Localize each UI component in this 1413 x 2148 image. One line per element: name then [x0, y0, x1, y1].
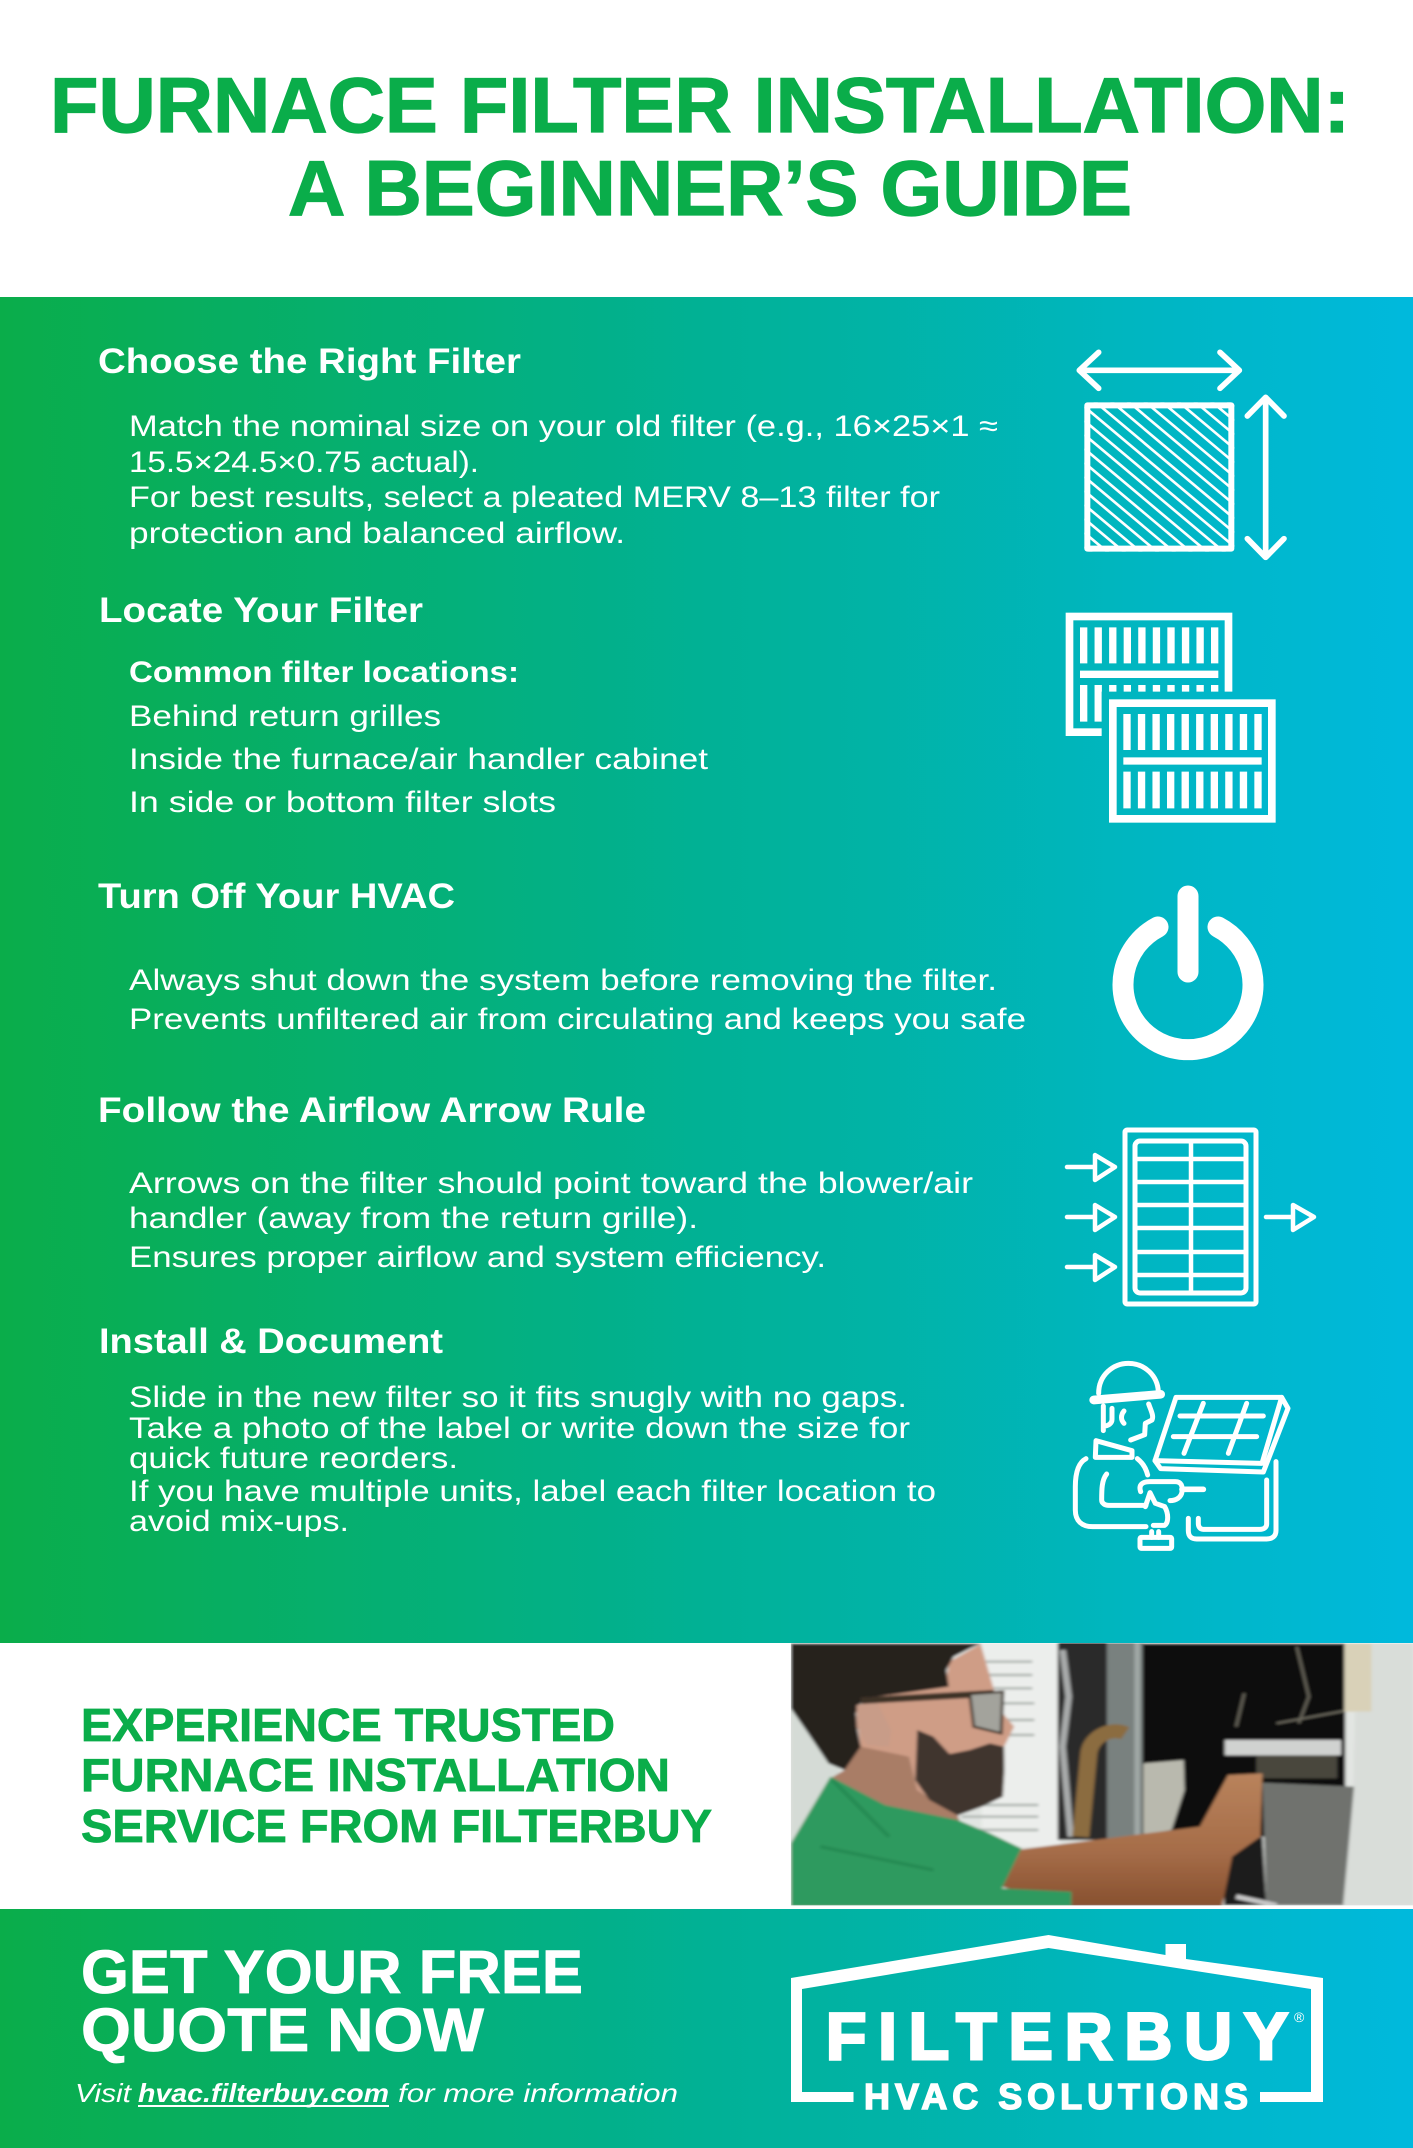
text: website link line: Visit: [75, 2078, 133, 2108]
text block: common filter locations: In side or bottom filter slots: [129, 786, 556, 819]
title: [50, 61, 1350, 232]
text block: airflow arrow rule: handler (away from the return grille).: [129, 1202, 698, 1235]
text block: install and document: avoid mix-ups.: [129, 1505, 349, 1538]
text block: airflow arrow rule: Arrows on the filter should point toward the blower/air: [129, 1167, 973, 1200]
title: A BEGINNER’S GUIDE: [288, 144, 1132, 232]
step 5: install and document: [99, 1322, 936, 1538]
icon: technician with drill and panel: [1075, 1363, 1288, 1548]
text block: common filter locations: [129, 656, 709, 819]
text block: airflow arrow rule: Ensures proper airflow and system efficiency.: [129, 1241, 826, 1274]
step 1: choose the right filter: [98, 342, 998, 550]
icon: airflow through filter: [1067, 1130, 1314, 1304]
step 3: turn off your hvac: [98, 877, 1026, 1036]
logo: filterbuy hvac solutions: [791, 1935, 1323, 2117]
heading: experience trusted service: FURNACE INSTALLATION: [81, 1749, 670, 1801]
text block: choose the right filter: For best results, select a pleated MERV 8–13 filter for: [129, 481, 940, 514]
logo house outline: [791, 1935, 1323, 2102]
step 4: follow the airflow arrow rule: [98, 1091, 973, 1274]
title: FURNACE FILTER INSTALLATION:: [50, 61, 1350, 149]
text block: choose the right filter: Match the nominal size on your old filter (e.g., 16×25×1 ≈: [129, 410, 998, 443]
heading: experience trusted service: SERVICE FROM FILTERBUY: [81, 1800, 712, 1852]
heading: turn off your hvac: Turn Off Your HVAC: [98, 877, 455, 916]
panel: service call to action: [82, 1643, 1413, 1906]
logo wordmark: FILTERBUY: [826, 1999, 1288, 2073]
text block: choose the right filter: [129, 410, 998, 550]
icon: return grilles: [1069, 616, 1272, 819]
panel: steps gradient band: [0, 297, 1413, 1643]
text block: install and document: quick future reorders.: [129, 1442, 458, 1475]
heading: get your free quote now: [81, 1938, 583, 2064]
text block: common filter locations: Inside the furnace/air handler cabinet: [129, 743, 709, 776]
text block: install and document: Slide in the new filter so it fits snugly with no gaps.: [129, 1381, 907, 1414]
text: website link line: hvac.filterbuy.com: [138, 2078, 389, 2108]
text block: common filter locations: Common filter locations:: [129, 656, 519, 689]
panel: quote gradient band: [0, 1909, 1413, 2148]
heading: follow the airflow arrow rule: Follow the Airflow Arrow Rule: [98, 1091, 646, 1130]
heading: get your free quote now: GET YOUR FREE: [81, 1938, 583, 2006]
icon: power button: [1123, 896, 1253, 1050]
text: website link line: for more information: [398, 2078, 678, 2108]
text block: choose the right filter: protection and balanced airflow.: [129, 517, 625, 550]
heading: experience trusted service: EXPERIENCE TRUSTED: [81, 1699, 615, 1751]
photo: technician working on furnace: [790, 1643, 1413, 1906]
step 2: locate your filter: [99, 591, 709, 819]
text block: install and document: Take a photo of the label or write down the size for: [129, 1412, 910, 1445]
heading: choose the right filter: Choose the Right Filter: [98, 342, 521, 381]
text block: install and document: If you have multiple units, label each filter location to: [129, 1475, 936, 1508]
heading: install and document: Install & Document: [99, 1322, 443, 1361]
text block: choose the right filter: 15.5×24.5×0.75 actual).: [129, 446, 479, 479]
text block: turn off your hvac: [129, 964, 1026, 1036]
logo registered mark: ®: [1294, 2009, 1305, 2025]
text block: common filter locations: Behind return grilles: [129, 700, 441, 733]
text: website link line: [75, 2078, 678, 2108]
heading: get your free quote now: QUOTE NOW: [81, 1996, 484, 2064]
text block: airflow arrow rule: [129, 1167, 973, 1274]
text block: turn off your hvac: Prevents unfiltered air from circulating and keeps you safe: [129, 1003, 1026, 1036]
icon: filter with size arrows: [1076, 350, 1287, 560]
text block: turn off your hvac: Always shut down the system before removing the filter.: [129, 964, 997, 997]
heading: locate your filter: Locate Your Filter: [99, 591, 423, 630]
heading: experience trusted service: [81, 1699, 712, 1852]
logo subtitle: HVAC SOLUTIONS: [864, 2076, 1248, 2117]
text block: install and document: [129, 1381, 936, 1538]
